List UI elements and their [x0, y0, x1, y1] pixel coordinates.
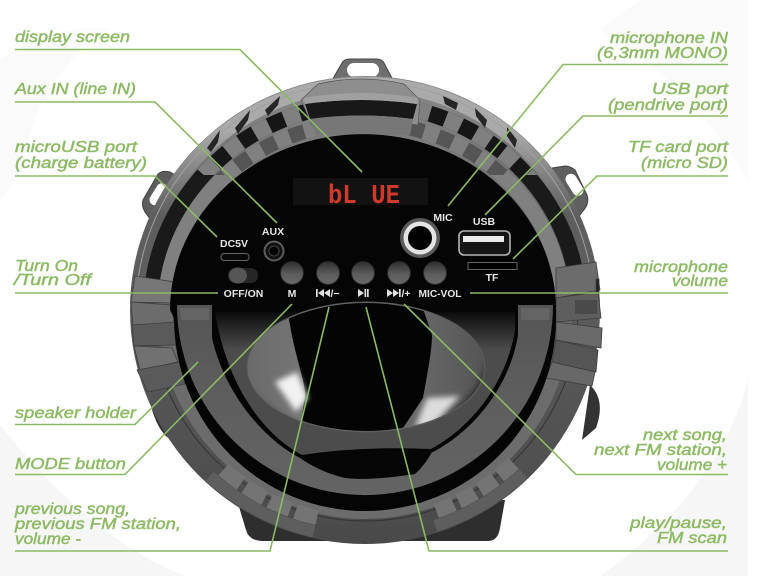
next button	[387, 262, 411, 300]
MIC-VOL button	[418, 262, 462, 300]
callout: play pause: play/pause,	[629, 515, 727, 532]
callout: microUSB port: microUSB port	[15, 139, 138, 156]
callout: usb port	[485, 81, 729, 215]
callout: mode button	[15, 304, 292, 474]
left hanging tab	[142, 171, 200, 240]
previous button	[316, 262, 340, 300]
callout: microphone in	[448, 30, 729, 206]
speaker device	[130, 59, 602, 544]
M button	[280, 262, 304, 300]
callout: microUSB port	[15, 139, 217, 237]
callout: next song: next song,	[643, 427, 727, 444]
speaker horn	[246, 302, 486, 432]
DC5V label: DC5V	[220, 238, 248, 250]
black control face	[170, 134, 556, 511]
speaker foot	[237, 500, 505, 541]
callout: play pause: FM scan	[657, 530, 727, 547]
callout: display screen: display screen	[15, 29, 130, 46]
MIC jack	[400, 212, 453, 258]
callout: turn on off: /Turn Off	[13, 272, 93, 289]
ring pockets	[207, 96, 517, 152]
callout: previous song: previous song,	[14, 501, 130, 518]
next label: /+	[401, 288, 411, 300]
top centre cap	[301, 79, 420, 135]
callout: microphone volume	[470, 259, 728, 293]
speaker holder band	[177, 305, 553, 495]
callout: usb port: (pendrive port)	[608, 97, 728, 114]
callout: speaker holder: speaker holder	[15, 405, 137, 422]
upper ring bands	[130, 77, 600, 302]
callout: microphone in: microphone IN	[610, 30, 729, 47]
AUX label: AUX	[262, 226, 284, 238]
callout: microphone volume: volume	[672, 273, 728, 290]
right hanging tab	[535, 166, 588, 230]
speaker skirt	[215, 312, 515, 455]
callout: play pause	[366, 307, 728, 551]
outer body ring	[130, 76, 600, 544]
callout: microphone volume: microphone	[634, 259, 728, 276]
callout: display screen	[15, 29, 362, 172]
USB port	[459, 216, 510, 255]
lower outer band	[152, 302, 578, 537]
callout: next song: volume +	[657, 457, 727, 474]
M label: M	[288, 288, 297, 300]
USB label: USB	[473, 216, 496, 228]
callout: microphone in: (6,3mm MONO)	[597, 45, 728, 62]
play pause button	[352, 262, 374, 297]
callout: aux in	[14, 81, 277, 223]
display screen	[293, 178, 428, 212]
display text: bL UE	[328, 182, 400, 212]
callout: turn on off: Turn On	[15, 258, 78, 275]
OFF/ON label: OFF/ON	[224, 288, 263, 300]
callout: usb port: USB port	[652, 81, 729, 98]
callout: turn on off	[13, 258, 218, 293]
callout: tf card port	[513, 139, 729, 259]
callout: previous song: volume -	[15, 531, 81, 548]
callout: previous song: previous FM station,	[14, 516, 181, 533]
callout: next song	[404, 304, 728, 474]
callout: mode button: MODE button	[15, 456, 126, 473]
right rear knob	[582, 385, 600, 440]
left rear knob	[152, 400, 184, 440]
TF label: TF	[486, 272, 499, 284]
callout: aux in: Aux IN (line IN)	[14, 81, 136, 98]
previous label: /−	[330, 288, 340, 300]
MIC label: MIC	[433, 212, 453, 224]
callout: previous song	[14, 307, 329, 551]
callout: next song: next FM station,	[594, 442, 727, 459]
left side grip	[131, 276, 185, 392]
callout: speaker holder	[15, 362, 198, 424]
black crescent	[300, 450, 432, 479]
callout: microUSB port: (charge battery)	[15, 155, 147, 172]
callout: tf card port: (micro SD)	[641, 155, 728, 172]
AUX jack	[262, 226, 284, 260]
power switch	[224, 268, 263, 300]
callout: tf card port: TF card port	[628, 139, 729, 156]
MIC-VOL label: MIC-VOL	[418, 288, 462, 300]
top hanging tab	[331, 59, 394, 82]
TF card slot	[468, 262, 517, 284]
right side grip	[546, 262, 602, 386]
microUSB port	[220, 238, 249, 260]
